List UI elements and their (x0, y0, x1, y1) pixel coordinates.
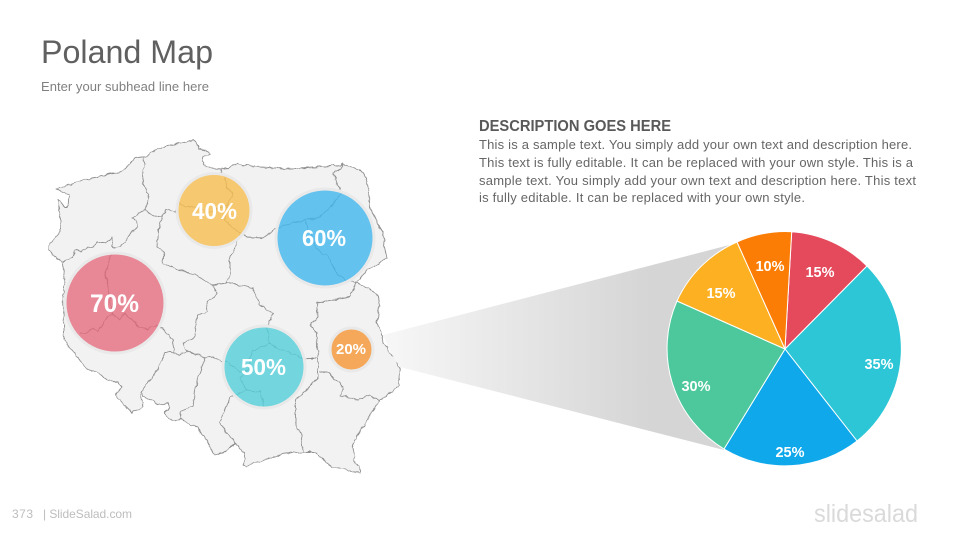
map outline (48, 140, 400, 473)
callout cone (383, 243, 737, 450)
description block (479, 118, 916, 205)
description body: is fully editable. It can be replaced with your own style. (479, 190, 805, 205)
pie labels: 15% (706, 285, 736, 302)
bubble: 60% (276, 189, 374, 287)
Poland map (48, 140, 400, 473)
voivodeship borders (63, 157, 380, 452)
bubble: 50%: 50% (241, 354, 286, 380)
pie labels: 25% (776, 444, 804, 461)
title: Poland Map (41, 34, 213, 70)
watermark logo: slidesalad (814, 500, 918, 528)
description body: sample text. You simply add your own text and description here. This text (479, 173, 916, 188)
pie labels: 30% (682, 378, 710, 395)
bubble: 70%: 70% (90, 290, 139, 318)
pie labels: 10% (756, 258, 784, 275)
description body: This is a sample text. You simply add your own text and description here. (479, 137, 912, 152)
slice: green 30% (667, 301, 785, 449)
pie labels: 15% (806, 264, 834, 281)
bubble: 50% (223, 326, 305, 408)
slice: orange 10% (737, 232, 792, 349)
pie labels: 35% (864, 356, 894, 373)
description body: This text is fully editable. It can be replaced with your own style. This is a (479, 155, 914, 170)
slice: yellow 15% (677, 242, 785, 349)
bubble: 70% (65, 253, 165, 353)
slice: red 15% (785, 232, 867, 349)
subhead: Enter your subhead line here (41, 79, 209, 94)
pie chart (667, 232, 901, 466)
bubble: 40% (177, 174, 251, 248)
bubble: 20%: 20% (336, 341, 366, 358)
description body (479, 137, 916, 205)
slice: teal 35% (785, 266, 901, 441)
pie labels (682, 258, 894, 461)
bubble: 40%: 40% (192, 198, 237, 224)
footer site name: | SlideSalad.com (43, 507, 132, 521)
bubble: 20% (330, 328, 373, 371)
slice: blue 25% (724, 349, 857, 466)
description heading: DESCRIPTION GOES HERE (479, 118, 671, 135)
footer page number: 373 (12, 507, 33, 521)
bubble: 60%: 60% (302, 225, 346, 251)
